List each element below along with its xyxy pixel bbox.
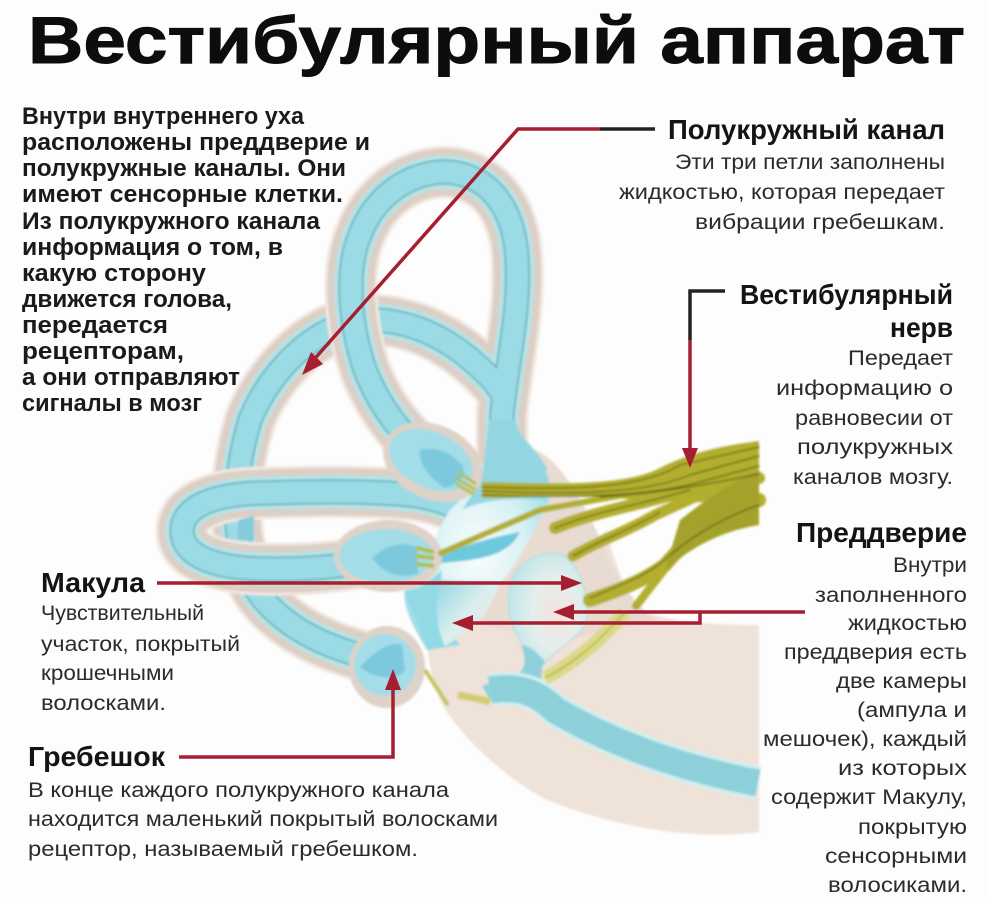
arrows: vestibule chambers <box>452 604 805 631</box>
label: macula: участок, покрытый <box>41 633 240 656</box>
text block: introduction: передается <box>22 312 168 339</box>
posterior arch canal <box>236 320 494 662</box>
superior ampulla <box>370 407 496 517</box>
superior canal <box>351 172 548 490</box>
text block: introduction: информация о том, в <box>22 234 283 261</box>
label: crista <box>28 741 498 861</box>
text block: introduction: полукружные каналы. Они <box>22 155 346 182</box>
text block: introduction: рецепторам, <box>22 338 184 365</box>
label: vestibule: жидкостью <box>848 612 967 635</box>
label: vestibular nerve: Вестибулярный <box>740 279 953 310</box>
label: crista: находится маленький покрытый волосками <box>28 808 498 831</box>
posterior ampulla <box>349 626 425 708</box>
label: vestibule: волосиками. <box>828 874 967 897</box>
label: semicircular canal: вибрации гребешкам. <box>695 211 945 234</box>
back tissue around vestibule <box>450 448 660 640</box>
text block: introduction: сигналы в мозг <box>22 390 202 417</box>
text block: introduction: расположены преддверие и <box>22 129 370 156</box>
horizontal canal <box>182 492 470 569</box>
illustration: inner ear anatomy <box>182 172 759 835</box>
label: vestibule: содержит Макулу, <box>771 786 967 809</box>
arrow: vestibular nerve <box>682 291 725 468</box>
label: crista: рецептор, называемый гребешком. <box>28 838 418 861</box>
label: vestibule: преддверия есть <box>784 641 967 664</box>
label: vestibule: две камеры <box>836 670 967 693</box>
horizontal ampulla <box>334 520 442 592</box>
text block: introduction <box>22 103 370 417</box>
label: vestibule: Внутри <box>893 554 967 577</box>
label: crista: Гребешок <box>28 741 166 772</box>
label: macula <box>41 567 240 715</box>
label: vestibular nerve: информацию о <box>776 377 953 400</box>
label: vestibule: мешочек), каждый <box>763 728 967 751</box>
label: vestibule: Преддверие <box>796 517 967 548</box>
label: vestibule: покрытую <box>858 816 967 839</box>
label: vestibule: (ампула и <box>857 699 967 722</box>
text block: introduction: какую сторону <box>22 260 207 287</box>
label: vestibular nerve: равновесии от <box>795 407 953 430</box>
label: vestibular nerve: нерв <box>890 312 953 343</box>
arrow: macula <box>157 575 582 591</box>
text block: introduction: движется голова, <box>22 286 232 313</box>
label: macula: волосками. <box>41 692 166 715</box>
label: macula: Чувствительный <box>41 602 204 625</box>
label: vestibular nerve: Передает <box>848 347 953 370</box>
label: macula: крошечными <box>41 662 174 685</box>
text block: introduction: Внутри внутреннего уха <box>22 103 305 130</box>
text block: introduction: имеют сенсорные клетки. <box>22 181 343 208</box>
title: Вестибулярный аппарат <box>28 3 965 77</box>
text block: introduction: а они отправляют <box>22 364 240 391</box>
label: macula: Макула <box>41 567 145 598</box>
label: vestibule: заполненного <box>815 584 967 607</box>
text block: introduction: Из полукружного канала <box>22 208 321 235</box>
saccule and duct <box>482 554 758 783</box>
vestibule <box>404 454 550 650</box>
label: vestibular nerve <box>740 279 954 489</box>
label: vestibule <box>763 517 968 897</box>
label: vestibule: сенсорными <box>825 845 967 868</box>
label: semicircular canal: Полукружный канал <box>668 114 945 145</box>
label: crista: В конце каждого полукружного канала <box>28 779 449 802</box>
label: vestibular nerve: каналов мозгу. <box>793 466 953 489</box>
label: vestibule: из которых <box>838 757 968 780</box>
arrow: crista <box>179 669 401 757</box>
label: vestibular nerve: полукружных <box>797 436 954 459</box>
nerve bundle <box>425 441 759 705</box>
label: semicircular canal: Эти три петли заполнены <box>675 151 945 174</box>
cochlea body <box>427 530 759 835</box>
label: semicircular canal <box>619 114 945 234</box>
arrow: semicircular canal <box>302 129 655 375</box>
label: semicircular canal: жидкостью, которая передает <box>619 181 945 204</box>
